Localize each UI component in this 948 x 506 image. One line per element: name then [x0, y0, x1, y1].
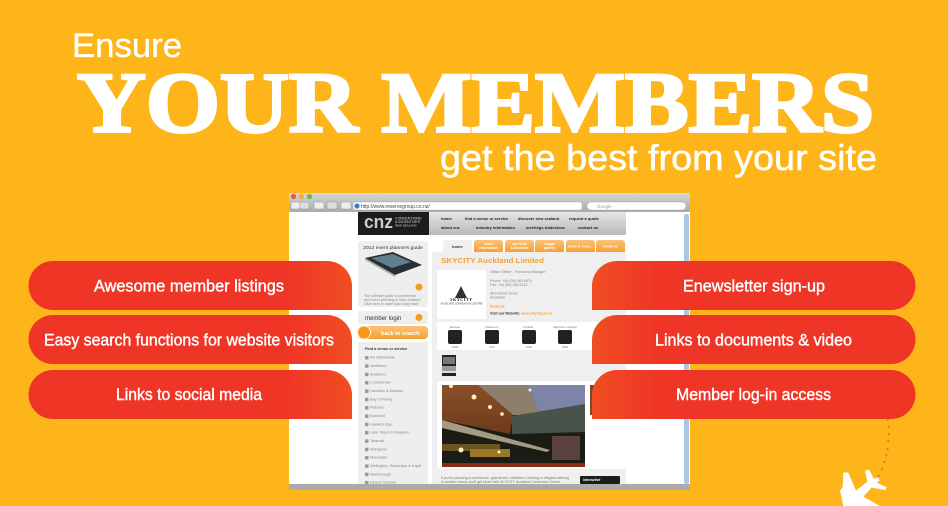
left sidebar: back to search button [358, 326, 428, 339]
content tabs: & facilities [511, 246, 528, 250]
site navigation: industry information [476, 225, 515, 230]
left sidebar: find a venue list: Wellington, Wairarapa & Kapiti [370, 464, 421, 468]
left sidebar: event planners guide: The ultimate guide to conference [364, 294, 416, 298]
content tabs: more [484, 242, 493, 246]
venue photo card [437, 381, 626, 469]
feature: Links to social media: Links to social media [116, 386, 263, 404]
left sidebar: find a venue list: Auckland [370, 372, 386, 376]
capacity icons card: Maximum Capacity [553, 325, 577, 329]
feature: Links to documents and video: Links to documents & video [655, 332, 852, 350]
site navigation: contact us [578, 225, 599, 230]
left sidebar: find a venue list: Marlborough [370, 472, 391, 476]
left sidebar: find a venue list: Northland [370, 364, 386, 368]
photo [442, 384, 585, 467]
left sidebar: find a venue list [358, 342, 428, 484]
browser chrome: http://www.reservegroup.co.nz/ [361, 204, 430, 210]
heading: Ensure: Ensure [72, 27, 182, 65]
left sidebar: event planners guide: 2012 event planners guide [363, 245, 423, 251]
dotted trail: right [877, 419, 890, 477]
content tabs: news & more... [568, 244, 593, 248]
left sidebar: find a venue list: Nelson Tasman [370, 480, 396, 484]
left sidebar: find a venue list: Lake Taupo & Ruapehu [370, 431, 410, 435]
venue contact details: 88 Federal Street [490, 292, 518, 296]
left sidebar: event planners guide: Click here to order your copy now! [364, 302, 419, 306]
venue contact details: Email us [490, 304, 505, 308]
venue description: to another venue you'll get More! with SKYCITY Auckland Convention Centre [441, 480, 560, 484]
heading: get the best from your site: get the best from your site [440, 137, 877, 178]
site navigation: find a venue or service [465, 216, 509, 221]
capacity icons card: 1500 [452, 345, 459, 349]
left sidebar: back to search button: back to search [381, 331, 420, 337]
left sidebar: event planners guide: and event planning in New Zealand [364, 298, 420, 302]
venue description [441, 476, 569, 484]
venue logo card: SKYCITY [450, 297, 473, 302]
left sidebar: find a venue list: Taranaki [370, 439, 385, 443]
browser chrome: Google [597, 204, 612, 209]
feature: Enewsletter sign-up: Enewsletter sign-up [683, 278, 825, 296]
left sidebar: find a venue list: Wanganui [370, 447, 387, 451]
feature: Enewsletter sign-up [592, 261, 916, 310]
left sidebar: find a venue list: Manawatu [370, 456, 388, 460]
venue logo card: AUCKLAND CONVENTION CENTRE [441, 302, 483, 306]
capacity icons card [437, 322, 626, 350]
browser window screenshot [289, 193, 690, 490]
capacity icons card: Cocktail [523, 325, 533, 329]
main content column [432, 240, 626, 484]
feature: Easy search functions [28, 315, 352, 364]
icon: aeroplane [840, 470, 887, 506]
venue logo card [437, 270, 486, 319]
small badge [442, 355, 456, 376]
venue contact details: Gillian Officer - Functions Manager [490, 270, 546, 274]
page area [289, 212, 690, 484]
site logo: cnz [364, 212, 393, 232]
site navigation: about cnz [441, 225, 460, 230]
browser chrome [289, 193, 690, 213]
content tabs: home [452, 244, 463, 249]
venue contact details: Visit our Website: www.skycity.co.nz [490, 312, 553, 316]
left sidebar: find a venue list: Bay of Plenty [370, 397, 392, 401]
content tabs: services [512, 242, 527, 246]
capacity icons card: 970 [490, 345, 495, 349]
status bar [289, 484, 690, 490]
left sidebar: find a venue list: Coromandel [370, 381, 391, 385]
capacity icons card: 4650 [562, 345, 569, 349]
interactive button [580, 476, 620, 484]
left sidebar: find a venue list: Eastland [370, 414, 385, 418]
site navigation: discover new zealand [518, 216, 560, 221]
content tabs: gallery [544, 246, 555, 250]
site logo: NEW ZEALAND [395, 224, 418, 228]
feature: Easy search functions: Easy search functions for website visitors [44, 332, 334, 350]
venue contact details: Fax: +64 (09) 363 6122 [490, 283, 527, 287]
site navigation: meetings tradeshow [526, 225, 566, 230]
feature: Member log-in access: Member log-in access [676, 386, 831, 404]
scrollbar [684, 214, 689, 484]
left sidebar: find a venue list: Rotorua [370, 406, 384, 410]
capacity icons card: 1500 [526, 345, 533, 349]
site logo: & INCENTIVES [395, 220, 421, 224]
site navigation: request a quote [569, 216, 600, 221]
feature: Awesome member listings: Awesome member listings [94, 278, 284, 296]
feature: Links to social media [28, 370, 352, 419]
venue heading: SKYCITY Auckland Limited [441, 258, 544, 265]
capacity icons card: Banquet [450, 325, 460, 329]
site navigation: home [441, 216, 452, 221]
left sidebar: member login: member login [365, 316, 401, 322]
capacity icons card: Classroom [485, 325, 499, 329]
site navigation [429, 212, 626, 235]
heading: YOUR MEMBERS: YOUR MEMBERS [77, 54, 874, 150]
interactive button: Interactive [583, 478, 601, 482]
feature: Member log-in access [592, 370, 916, 419]
venue contact details: Auckland [490, 296, 505, 300]
venue contact details: Phone: +64 (09) 363 6070 [490, 279, 532, 283]
left sidebar: find a venue list: Hamilton & Waikato [370, 389, 403, 393]
left sidebar: event planners guide [358, 241, 428, 307]
content tabs: email us [603, 244, 618, 248]
venue description: If you're planning a conference, gala dinner, exhibition, meeting or elegant catering [441, 476, 569, 480]
left sidebar: find a venue list: NZ Nationwide [370, 356, 395, 360]
feature: Awesome member listings [28, 261, 352, 310]
dotted trail: left [75, 421, 203, 498]
content tabs: information [479, 246, 498, 250]
left sidebar: find a venue list: Find a venue or service [365, 347, 407, 351]
site logo: CONVENTIONS [395, 216, 422, 220]
venue contact details [490, 270, 553, 316]
content tabs [443, 240, 625, 252]
feature: Links to documents and video [592, 315, 916, 364]
content tabs: image [544, 242, 555, 246]
site logo [358, 212, 429, 235]
left sidebar: member login [358, 311, 428, 324]
left sidebar: find a venue list: Hawke's Bay [370, 422, 392, 426]
